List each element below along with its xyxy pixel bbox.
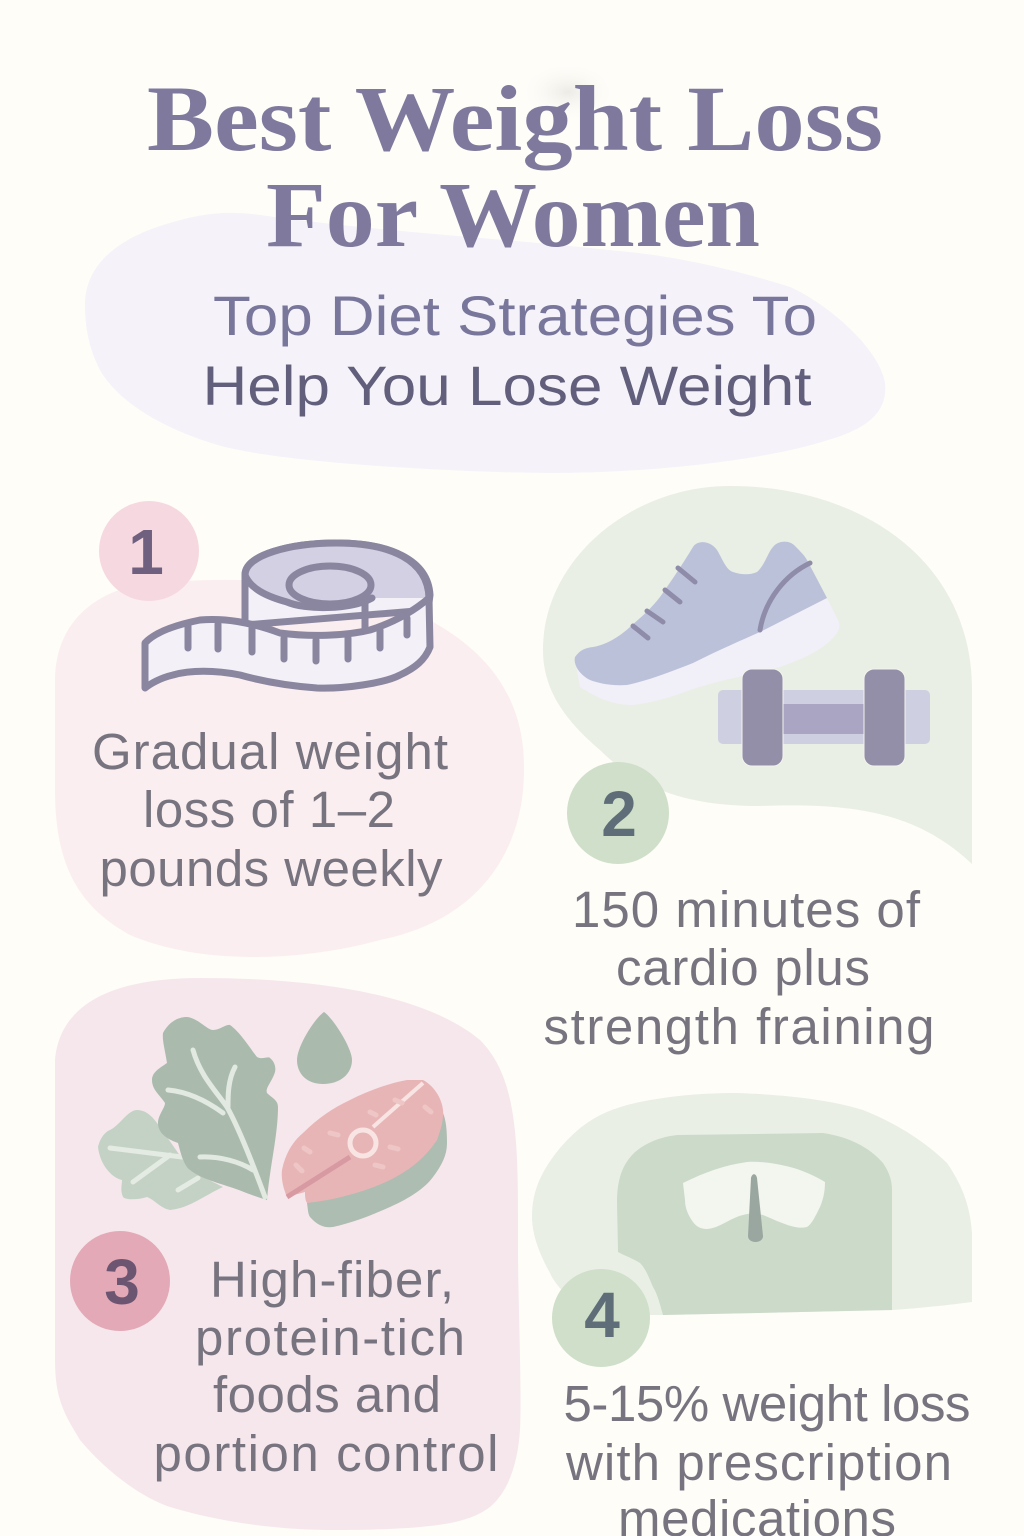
panel background (532, 1093, 972, 1315)
tape inner ring (289, 566, 371, 604)
icon: measuring tape (145, 543, 430, 688)
text: step 1: pounds weekly (100, 840, 443, 897)
panel: step 4 medications (532, 1093, 972, 1536)
text: step 2: cardio plus (616, 939, 870, 996)
panel background (55, 580, 524, 957)
tape roll top face (245, 543, 429, 609)
number badge 1: 1 (128, 516, 164, 588)
sneaker upper (575, 542, 827, 685)
panel background (543, 486, 972, 864)
icon: small leaf (98, 1110, 223, 1210)
number badge 3: 3 (104, 1246, 140, 1318)
icon: water drop (297, 1012, 352, 1084)
icon: dumbbell (718, 669, 930, 766)
panel: step 3 nutrition (55, 978, 521, 1530)
number badge 4 (552, 1269, 650, 1367)
text: step 3: protein-tich (195, 1309, 465, 1366)
panel: header (85, 68, 885, 473)
subtitle: Top Diet Strategies To (213, 284, 817, 347)
sneaker sole (575, 598, 839, 705)
panel: step 1 gradual weight loss (55, 501, 524, 957)
text: step 3: foods and (213, 1366, 441, 1423)
text: step 2 (544, 881, 934, 1055)
text: step 3: High-fiber, (210, 1251, 454, 1308)
number badge 3 (70, 1231, 170, 1331)
tape roll side (245, 543, 430, 625)
sneaker laces (633, 563, 810, 638)
number badge 4: 4 (584, 1279, 620, 1351)
subtitle: Help You Lose Weight (202, 354, 812, 417)
text: step 1: Gradual weight (92, 723, 448, 780)
number badge 2 (567, 762, 669, 864)
icon: scale (617, 1133, 892, 1315)
text: step 3: portion control (154, 1425, 498, 1482)
text: step 2: strength fraining (544, 998, 934, 1055)
subtitle (202, 284, 817, 417)
title: For Women (266, 164, 760, 267)
tape ribbon (145, 598, 430, 688)
icon: large leaf (152, 1017, 278, 1200)
title (147, 68, 883, 267)
icon: sneaker (575, 542, 839, 705)
number badge 1 (99, 501, 199, 601)
text: step 1: loss of 1–2 (143, 781, 395, 838)
subtitle blob (85, 213, 885, 473)
text: step 4: with prescription (565, 1434, 952, 1491)
icon: salmon (282, 1080, 447, 1227)
title: Best Weight Loss (147, 68, 883, 171)
panel: step 2 exercise (543, 486, 972, 1055)
number badge 2: 2 (601, 778, 637, 850)
text: step 3 (154, 1251, 498, 1482)
panel background (55, 978, 521, 1530)
text: step 4 (564, 1375, 970, 1536)
text: step 4: 5-15% weight loss (564, 1375, 970, 1432)
text: step 2: 150 minutes of (572, 881, 921, 938)
text: step 1 (92, 723, 448, 897)
